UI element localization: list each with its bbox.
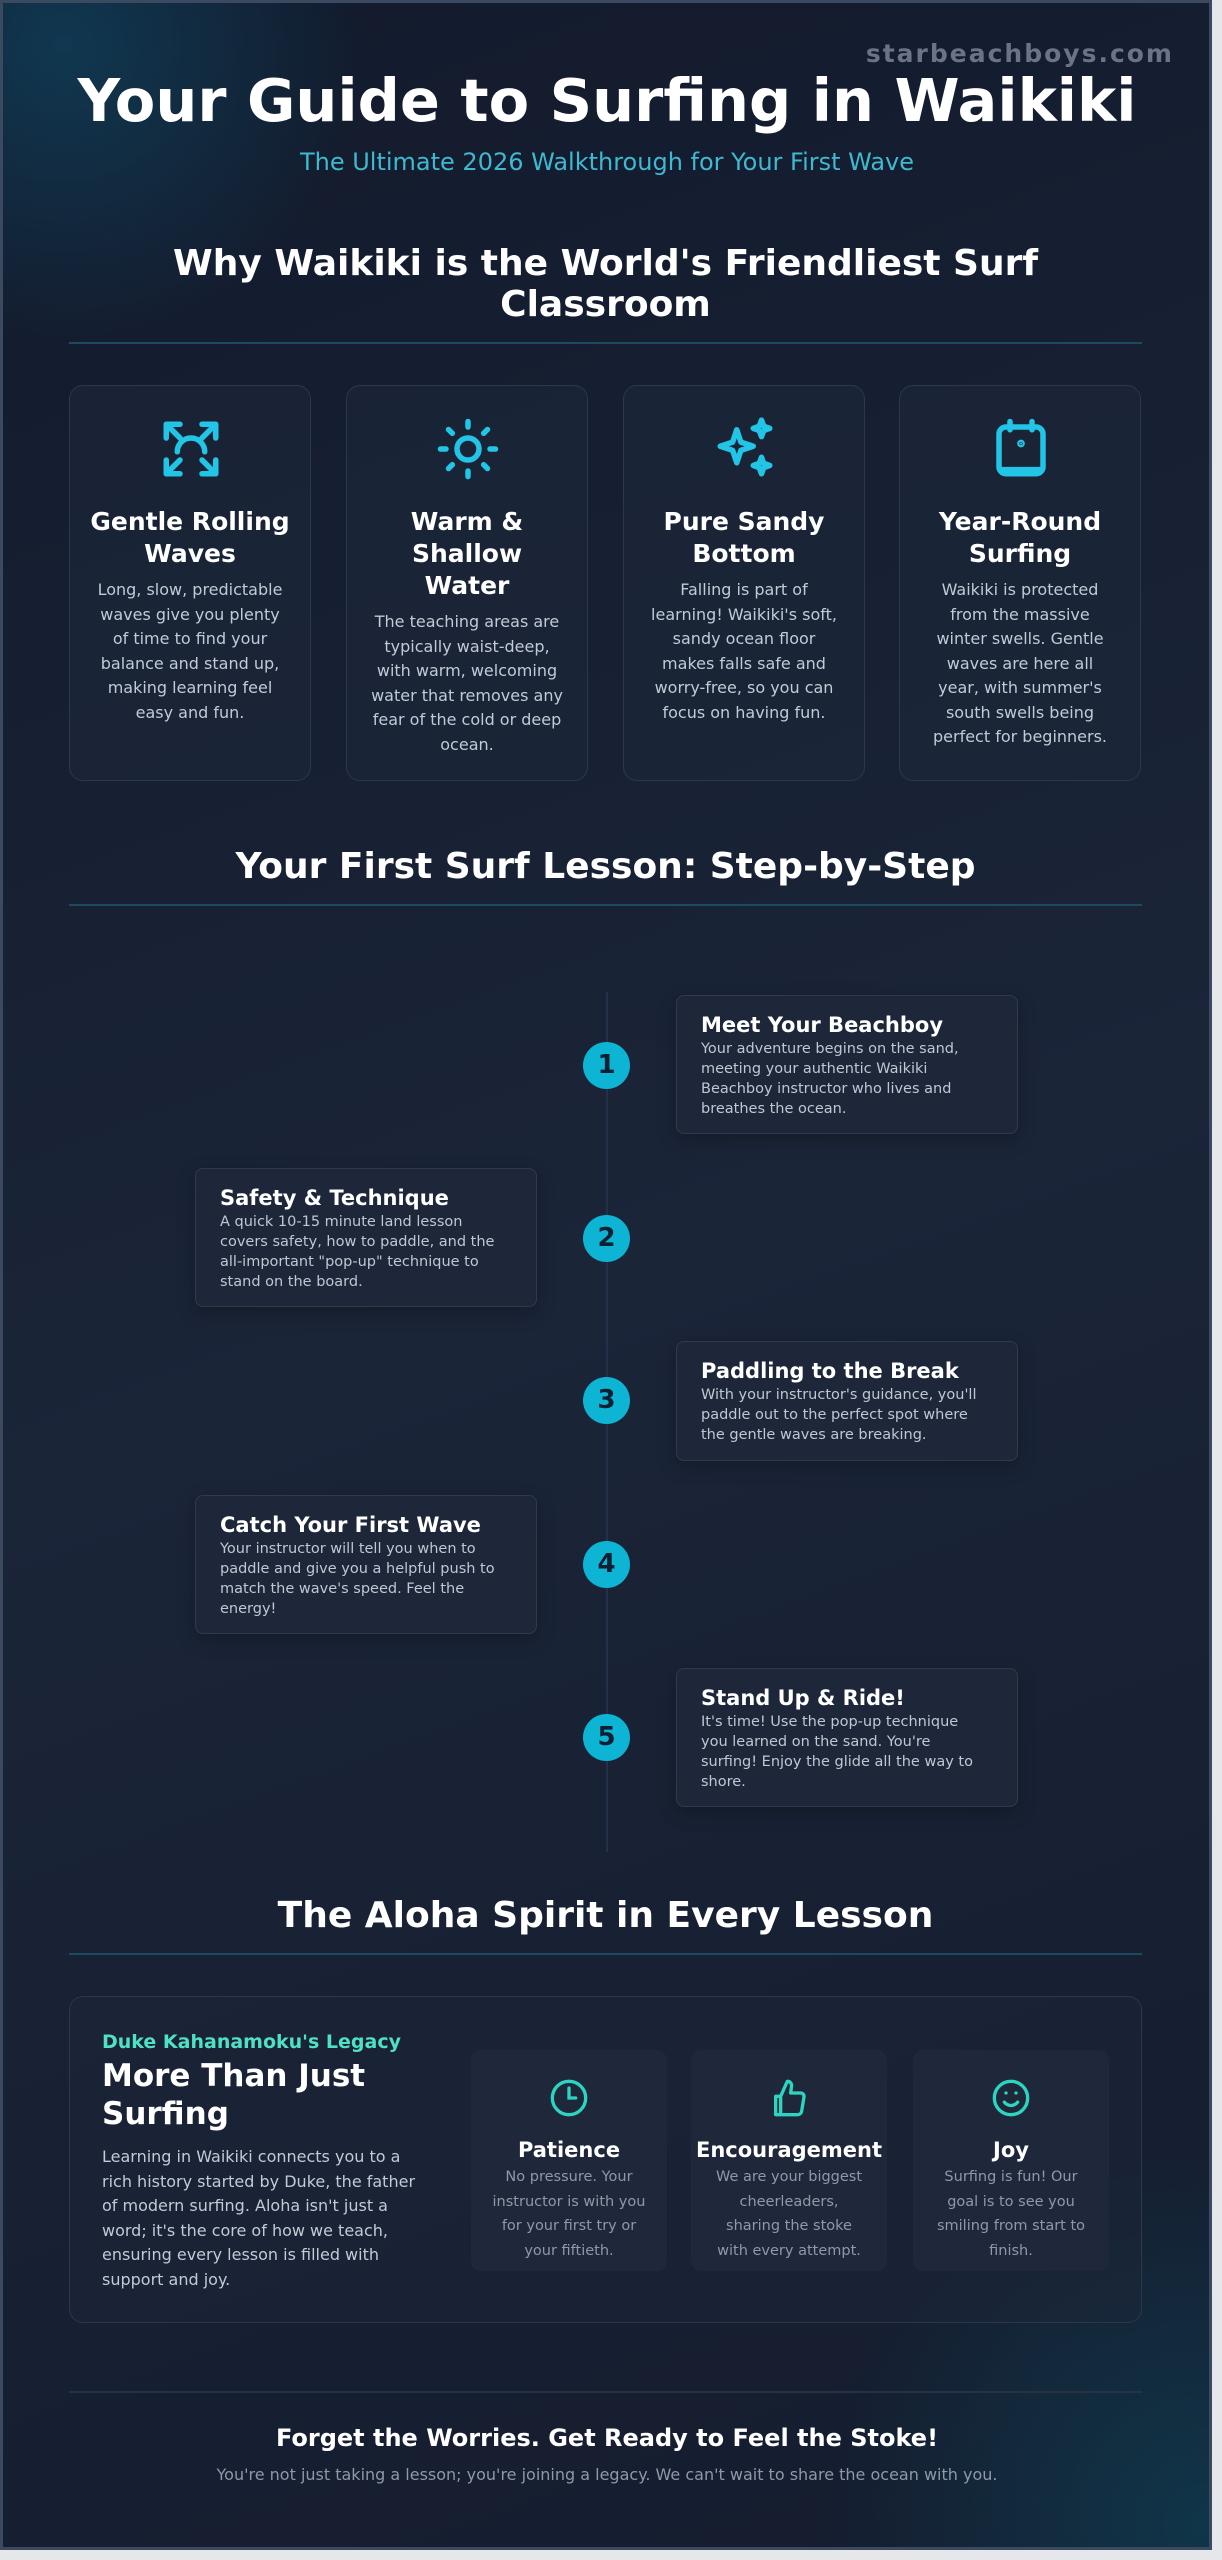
- watermark: starbeachboys.com: [866, 39, 1174, 68]
- footer subtitle: You're not just taking a lesson; you're joining a legacy. We can't wait to share the ocean with you.: [217, 2465, 997, 2484]
- panel: aloha: [69, 1996, 1142, 2323]
- step 2: A quick 10-15 minute land lesson covers safety, how to paddle, and the all-important "pop-up" technique to stand on the board.: [220, 1214, 494, 1290]
- footer title: Forget the Worries. Get Ready to Feel the Stoke!: [276, 2424, 938, 2452]
- value: joy: [913, 2050, 1109, 2271]
- step 4: Catch Your First Wave: [220, 1513, 481, 1537]
- value: joy: Surfing is fun! Our goal is to see you smiling from start to finish.: [937, 2169, 1085, 2258]
- step 3: With your instructor's guidance, you'll paddle out to the perfect spot where the gentle waves are breaking.: [701, 1387, 976, 1443]
- heading: why waikiki: Classroom: [500, 284, 711, 325]
- step 1: Your adventure begins on the sand, meeting your authentic Waikiki Beachboy instructor who lives and breathes the ocean.: [701, 1041, 959, 1117]
- icon: calendar: [996, 418, 1046, 476]
- paragraph: Learning in Waikiki connects you to a rich history started by Duke, the father of modern surfing. Aloha isn't just a word; it's the core of how we teach, ensuring every lesson is filled with support and joy.: [102, 2147, 415, 2288]
- card: warm water: The teaching areas are typically waist-deep, with warm, welcoming water that removes any fear of the cold or deep ocean.: [371, 612, 563, 754]
- number 5: 5: [597, 1722, 616, 1752]
- card: year-round: Surfing: [969, 539, 1071, 568]
- icon: clock: [550, 2080, 588, 2116]
- step 5: Stand Up & Ride!: [701, 1686, 905, 1710]
- card: warm water: Shallow: [412, 539, 522, 568]
- timeline: [606, 992, 608, 1852]
- number 3: 3: [597, 1385, 616, 1415]
- card: gentle waves: Long, slow, predictable waves give you plenty of time to find your balance and stand up, making learning feel easy and fun.: [98, 580, 282, 722]
- heading: why waikiki: Why Waikiki is the World's Friendliest Surf: [173, 243, 1038, 284]
- value: patience: [471, 2050, 667, 2271]
- heading: first lesson: Your First Surf Lesson: Step-by-Step: [235, 846, 976, 887]
- icon: sun: [438, 418, 498, 480]
- step 1: [676, 995, 1018, 1134]
- step 2: [195, 1168, 537, 1307]
- number 4: [583, 1541, 630, 1588]
- step 5: It's time! Use the pop-up technique you learned on the sand. You're surfing! Enjoy the glide all the way to shore.: [701, 1714, 973, 1790]
- value: patience: Patience: [518, 2138, 620, 2162]
- icon: sparkles: [718, 417, 772, 476]
- icon: smile: [992, 2080, 1030, 2116]
- card: gentle waves: [69, 385, 311, 781]
- label: duke legacy: Duke Kahanamoku's Legacy: [102, 2031, 401, 2053]
- number 5: [583, 1714, 630, 1761]
- heading: more than surfing: More Than Just: [102, 2058, 365, 2094]
- number 1: [583, 1042, 630, 1089]
- title: Your Guide to Surfing in Waikiki: [77, 66, 1136, 135]
- value: patience: No pressure. Your instructor is with you for your first try or your fiftieth.: [493, 2169, 645, 2258]
- heading: more than surfing: Surfing: [102, 2096, 229, 2132]
- icon: waves arrows: [164, 422, 218, 476]
- value: joy: Joy: [993, 2138, 1029, 2162]
- card: sandy bottom: Bottom: [692, 539, 796, 568]
- value: encouragement: [691, 2050, 887, 2271]
- number 2: [583, 1215, 630, 1262]
- heading: aloha: The Aloha Spirit in Every Lesson: [278, 1895, 933, 1936]
- card: year-round: [899, 385, 1141, 781]
- card: sandy bottom: Falling is part of learning! Waikiki's soft, sandy ocean floor makes falls safe and worry-free, so you can focus on having fun.: [651, 580, 837, 722]
- card: gentle waves: Gentle Rolling Waves: [90, 507, 290, 568]
- card: sandy bottom: [623, 385, 865, 781]
- step 5: [676, 1668, 1018, 1807]
- value: encouragement: We are your biggest cheerleaders, sharing the stoke with every attempt.: [716, 2169, 862, 2258]
- value: encouragement: Encouragement: [696, 2138, 882, 2162]
- number 3: [583, 1377, 630, 1424]
- card: year-round: Year-Round: [939, 507, 1101, 536]
- heading: why waikiki: [173, 243, 1038, 325]
- icon: thumbs up: [774, 2080, 806, 2116]
- number 1: 1: [597, 1050, 616, 1080]
- step 2: Safety & Technique: [220, 1186, 449, 1210]
- card: warm water: Water: [425, 571, 509, 600]
- card: year-round: Waikiki is protected from the massive winter swells. Gentle waves are here all year, with summer's south swells being perfect for beginners.: [933, 580, 1107, 746]
- card: warm water: Warm &: [411, 507, 523, 536]
- subtitle: The Ultimate 2026 Walkthrough for Your First Wave: [300, 148, 914, 176]
- card: sandy bottom: Pure Sandy: [664, 507, 824, 536]
- heading: more than surfing: [102, 2058, 365, 2132]
- step 3: [676, 1341, 1018, 1461]
- step 1: Meet Your Beachboy: [701, 1013, 943, 1037]
- number 4: 4: [597, 1549, 616, 1579]
- step 3: Paddling to the Break: [701, 1359, 959, 1383]
- step 4: Your instructor will tell you when to paddle and give you a helpful push to match the wave's speed. Feel the energy!: [220, 1541, 495, 1617]
- number 2: 2: [597, 1223, 616, 1253]
- step 4: [195, 1495, 537, 1634]
- card: warm water: [346, 385, 588, 781]
